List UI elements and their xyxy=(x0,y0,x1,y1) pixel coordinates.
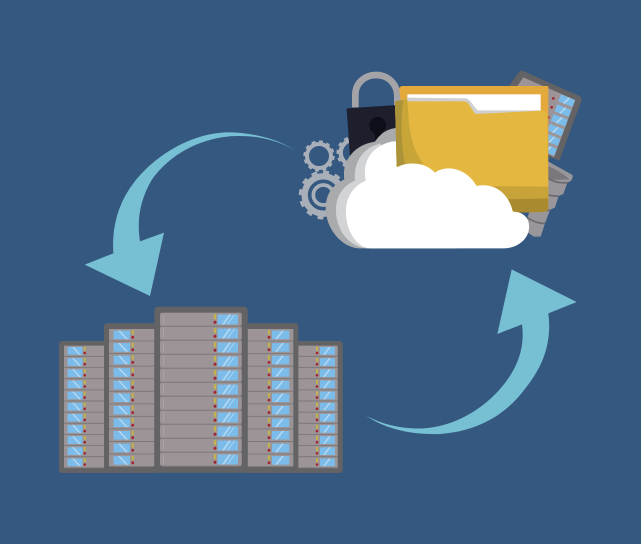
inner right rack xyxy=(243,323,298,473)
center rack xyxy=(154,307,248,473)
cloud back lobe xyxy=(365,141,410,193)
icon: partial gear behind lock xyxy=(338,137,369,168)
icon: small gear xyxy=(304,141,334,171)
icon: tilted server xyxy=(503,71,582,161)
server rack group xyxy=(59,307,343,473)
arrow: cloud to server (curving down left) xyxy=(85,132,296,296)
inner left rack xyxy=(104,323,159,473)
outer left rack xyxy=(59,341,109,473)
icon: large gear xyxy=(300,172,346,218)
icon: padlock xyxy=(347,75,398,157)
cloud storage cluster xyxy=(300,71,582,248)
icon: folder xyxy=(395,86,548,213)
cloud front xyxy=(346,163,529,248)
icon: database stack xyxy=(523,161,573,237)
cloud shadow layers xyxy=(326,128,463,248)
outer right rack xyxy=(293,341,343,473)
arrow: server to cloud (curving up right) xyxy=(366,269,577,434)
